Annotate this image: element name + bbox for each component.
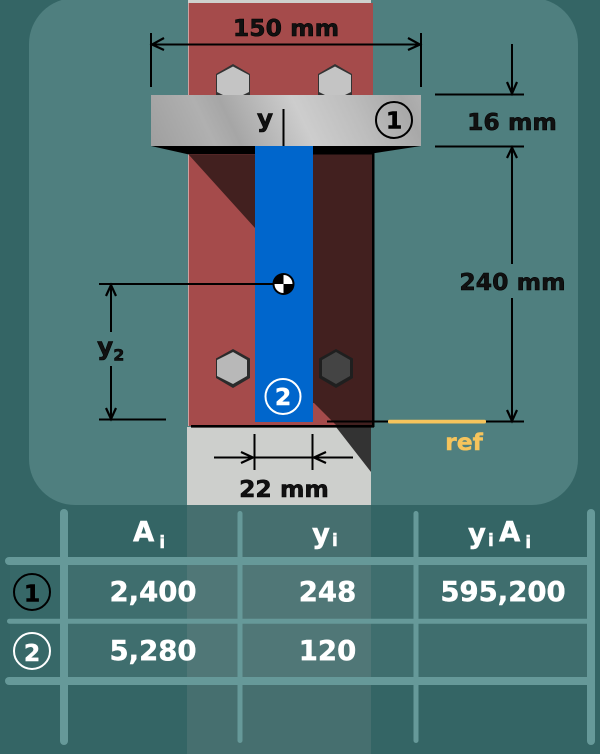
- dimension y2: 2: [113, 346, 124, 364]
- table row 1: 595,200: [440, 576, 566, 608]
- dimension 16 mm: 16 mm: [467, 108, 557, 136]
- angle section: [187, 0, 374, 505]
- table row 2: 2: [24, 639, 40, 667]
- reference line: ref: [445, 428, 484, 456]
- dimension 22 mm: 22 mm: [239, 475, 329, 503]
- table: body row shade: [64, 560, 591, 682]
- flange shadow: [151, 146, 421, 154]
- dimension 22 mm: [214, 434, 353, 503]
- circled number 2 on web: 2: [275, 383, 291, 411]
- dimension 150 mm: [151, 14, 421, 87]
- table: column band: [187, 505, 371, 754]
- reference line: [327, 420, 524, 456]
- dimension 16 mm: [435, 44, 557, 422]
- table header: i: [159, 533, 165, 553]
- dimension 240 mm: [459, 268, 566, 421]
- dimension 240 mm: 240 mm: [459, 268, 566, 296]
- circled number 1 on flange: 1: [386, 106, 402, 134]
- table row 2: [14, 633, 356, 669]
- table row 1: 1: [24, 580, 40, 608]
- table header: y: [312, 518, 330, 550]
- table header: A: [499, 516, 520, 548]
- y label and axis tick: [257, 104, 284, 146]
- top bolts: [216, 64, 352, 95]
- centroid marker: [272, 273, 294, 295]
- table header: i: [525, 533, 531, 553]
- lower bolts: [216, 349, 353, 388]
- y label and axis tick: y: [257, 104, 273, 133]
- table header: A: [133, 516, 154, 548]
- table header: [133, 516, 531, 553]
- circled number 2 on web: [266, 379, 300, 414]
- table row 2: 120: [299, 635, 356, 667]
- table row 1: 2,400: [110, 576, 196, 608]
- table grid: [5, 509, 595, 745]
- flange plate 1: [151, 95, 421, 146]
- diagram panel: [29, 0, 578, 505]
- circled number 1 on flange: [376, 102, 412, 138]
- table header: i: [488, 531, 494, 551]
- table header: y: [468, 518, 486, 550]
- dimension y2: y: [97, 332, 113, 361]
- table: first column shade: [10, 560, 64, 682]
- table row 1: 248: [299, 576, 356, 608]
- web plate 2: [255, 146, 313, 422]
- table row 1: [14, 574, 566, 610]
- table header: i: [332, 531, 338, 551]
- dimension 150 mm: 150 mm: [233, 14, 339, 42]
- table row 2: 5,280: [110, 635, 196, 667]
- dimension y2: [97, 284, 273, 420]
